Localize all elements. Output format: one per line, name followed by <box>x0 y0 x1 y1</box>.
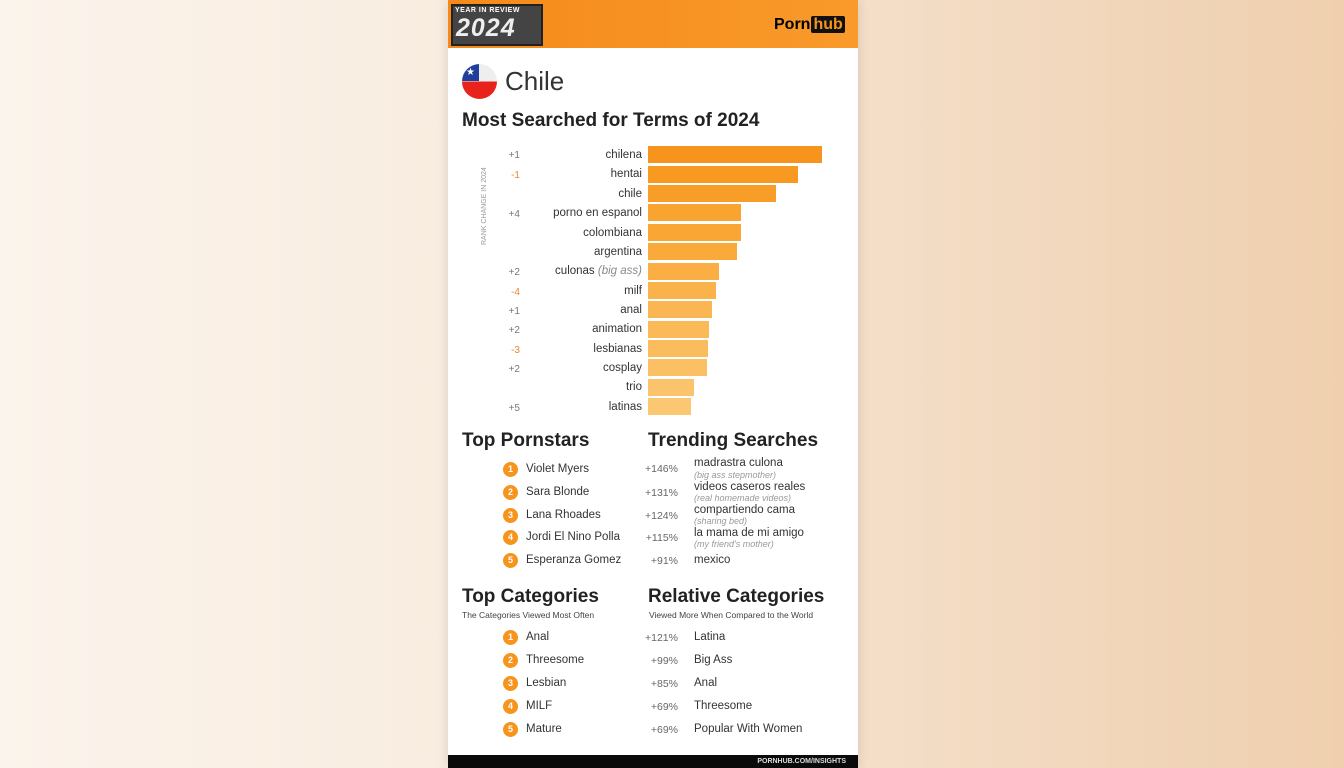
bar chart: search terms: -1 <box>511 170 520 181</box>
bar chart: search terms: +4 <box>509 209 520 220</box>
panel: top pornstars: 5 <box>508 555 513 565</box>
footer <box>448 755 858 768</box>
panel: relative categories: +69% <box>651 724 678 736</box>
bar chart: search terms: lesbianas <box>593 343 642 355</box>
bar chart: search terms: anal <box>620 304 642 316</box>
panel: top categories: The Categories Viewed Most Often <box>462 610 594 620</box>
panel: trending searches: (my friend's mother) <box>694 539 774 549</box>
bar chart: search terms: milf <box>624 285 642 297</box>
panel: relative categories: Popular With Women <box>694 723 802 735</box>
panel: trending searches: (big ass stepmother) <box>694 470 776 480</box>
bar chart: search terms: +1 <box>509 150 520 161</box>
panel: relative categories: +99% <box>651 655 678 667</box>
panel: trending searches: +131% <box>645 487 678 499</box>
bar chart: search terms: +5 <box>509 403 520 414</box>
panel: trending searches <box>645 430 818 567</box>
panel: relative categories: +69% <box>651 701 678 713</box>
bar chart: search terms: culonas (big ass) <box>555 265 642 277</box>
panel: top categories: 3 <box>508 678 513 688</box>
icon: chile flag <box>462 64 497 99</box>
panel: top pornstars: Top Pornstars <box>462 430 589 451</box>
bar chart: search terms: colombiana <box>583 227 642 239</box>
bar chart: search terms: animation <box>592 323 642 335</box>
bar chart: search terms: cosplay <box>603 362 642 374</box>
panel: top pornstars: Esperanza Gomez <box>526 554 621 566</box>
panel: top pornstars: Sara Blonde <box>526 486 589 498</box>
panel: relative categories: Threesome <box>694 700 752 712</box>
panel: top categories: Top Categories <box>462 586 599 607</box>
footer: PORNHUB.COM/INSIGHTS <box>757 758 846 765</box>
header bar <box>448 0 858 48</box>
panel: relative categories: +121% <box>645 632 678 644</box>
panel: trending searches: madrastra culona <box>694 457 783 469</box>
panel: trending searches: la mama de mi amigo <box>694 527 804 539</box>
bar chart: search terms: -3 <box>511 345 520 356</box>
panel: trending searches: compartiendo cama <box>694 504 795 516</box>
icon: chile flag: ★ <box>466 67 475 78</box>
panel: top categories: 5 <box>508 724 513 734</box>
bar chart: search terms: argentina <box>594 246 642 258</box>
country heading <box>462 64 564 99</box>
panel: trending searches: +124% <box>645 510 678 522</box>
bar chart: search terms: +2 <box>509 364 520 375</box>
panel: top categories: Anal <box>526 631 549 643</box>
panel: top categories: Threesome <box>526 654 584 666</box>
panel: relative categories <box>645 586 824 736</box>
panel: relative categories: +85% <box>651 678 678 690</box>
bar chart: search terms: porno en espanol <box>553 207 642 219</box>
pornhub logo: Pornhub <box>774 16 843 33</box>
card <box>448 0 858 768</box>
panel: trending searches: (real homemade videos) <box>694 493 791 503</box>
bar chart: search terms: +2 <box>509 325 520 336</box>
panel: top categories: 4 <box>508 701 513 711</box>
panel: top categories: Mature <box>526 723 562 735</box>
panel: relative categories: Anal <box>694 677 717 689</box>
panel: relative categories: Relative Categories <box>648 586 824 607</box>
bar chart: search terms: +2 <box>509 267 520 278</box>
bar chart: search terms: trio <box>626 381 642 393</box>
country heading: Chile <box>505 66 564 96</box>
panel: top categories: Lesbian <box>526 677 566 689</box>
panel: trending searches: mexico <box>694 554 730 566</box>
year in review logo <box>451 4 543 46</box>
panel: top pornstars: Violet Myers <box>526 463 589 475</box>
panel: top pornstars: 2 <box>508 487 513 497</box>
bar chart: search terms: hentai <box>611 168 642 180</box>
panel: trending searches: +91% <box>651 555 678 567</box>
bar chart: search terms: -4 <box>511 287 520 298</box>
title: Most Searched for Terms of 2024 <box>462 110 759 131</box>
panel: relative categories: Big Ass <box>694 654 732 666</box>
bar chart: search terms: latinas <box>609 401 642 413</box>
bar chart: search terms: chilena <box>606 149 642 161</box>
panel: top pornstars: 1 <box>508 464 513 474</box>
year in review logo: YEAR IN REVIEW <box>455 7 520 14</box>
panel: trending searches: +115% <box>646 532 678 544</box>
panel: top pornstars: 4 <box>508 532 513 542</box>
panel: top pornstars: 3 <box>508 510 513 520</box>
panel: top categories: 1 <box>508 632 513 642</box>
panel: top categories: 2 <box>508 655 513 665</box>
panel: relative categories: Latina <box>694 631 725 643</box>
panel: trending searches: videos caseros reales <box>694 481 805 493</box>
panel: relative categories: Viewed More When Compared to the World <box>649 610 813 620</box>
bar chart: search terms: RANK CHANGE IN 2024 <box>481 167 488 245</box>
panel: top pornstars: Jordi El Nino Polla <box>526 531 620 543</box>
panel: top pornstars <box>462 430 621 568</box>
panel: trending searches: +146% <box>645 463 678 475</box>
panel: top categories <box>462 586 599 737</box>
panel: top categories: MILF <box>526 700 552 712</box>
bar chart: search terms: chile <box>618 188 642 200</box>
panel: trending searches: (sharing bed) <box>694 516 747 526</box>
panel: top pornstars: Lana Rhoades <box>526 509 601 521</box>
panel: trending searches: Trending Searches <box>648 430 818 451</box>
year in review logo: 2024 <box>456 14 516 42</box>
bar chart: search terms <box>481 146 822 415</box>
bar chart: search terms: +1 <box>509 306 520 317</box>
